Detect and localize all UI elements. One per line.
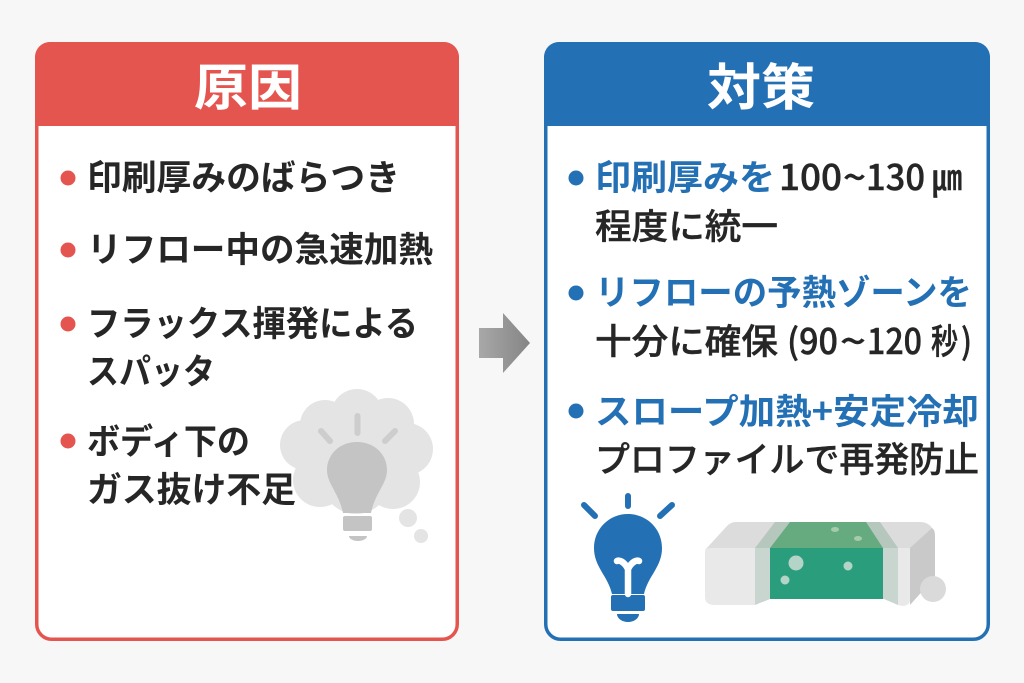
cause 1: 印刷厚みのばらつき bbox=[87, 150, 400, 201]
heading: causes: 原因 bbox=[194, 48, 302, 120]
measure 2: 十分に確保 bbox=[595, 314, 778, 365]
panel frame bbox=[546, 44, 988, 639]
measure 2: リフローの予熱ゾーンを bbox=[595, 265, 972, 316]
measure 1 bbox=[568, 150, 962, 250]
measure 3: プロファイルで再発防止 bbox=[595, 432, 979, 483]
measure 1: 印刷厚みを bbox=[595, 150, 775, 201]
cause 3: フラックス揮発による bbox=[87, 296, 418, 347]
measure 1: 130 bbox=[866, 150, 925, 201]
icon: blue light bulb bbox=[584, 496, 672, 622]
cause 3: スパッタ bbox=[87, 344, 215, 395]
panel: causes bbox=[35, 42, 459, 639]
cause 4: ガス抜け不足 bbox=[87, 462, 296, 513]
panel frame bbox=[37, 44, 457, 639]
measure 2: 秒 bbox=[931, 314, 958, 365]
cause 3 bbox=[60, 296, 418, 395]
measure 1: ~ bbox=[843, 150, 866, 201]
measure 1: ㎛ bbox=[932, 150, 962, 201]
cause 4 bbox=[60, 414, 296, 513]
icon: grey thought bubble with light bulb bbox=[280, 389, 433, 543]
cause 2: リフロー中の急速加熱 bbox=[87, 222, 433, 273]
heading: countermeasures: 対策 bbox=[707, 48, 815, 120]
panel header band bbox=[544, 42, 990, 126]
measure 2: 120 bbox=[867, 314, 922, 365]
measure 1: 程度に統一 bbox=[595, 199, 778, 250]
arrow bbox=[479, 313, 530, 373]
measure 2: (90 bbox=[787, 314, 838, 365]
cause 4: ボディ下の bbox=[87, 414, 250, 465]
panel header band bbox=[35, 42, 459, 126]
panel: countermeasures bbox=[544, 42, 990, 639]
icon: chip component with green solder bbox=[705, 522, 946, 606]
measure 1: 100 bbox=[779, 150, 842, 201]
measure 3: スロープ加熱+安定冷却 bbox=[595, 384, 979, 435]
measure 2 bbox=[568, 265, 972, 365]
measure 2: ~ bbox=[840, 314, 866, 365]
measure 2: ) bbox=[961, 314, 972, 365]
measure 3 bbox=[568, 384, 979, 483]
